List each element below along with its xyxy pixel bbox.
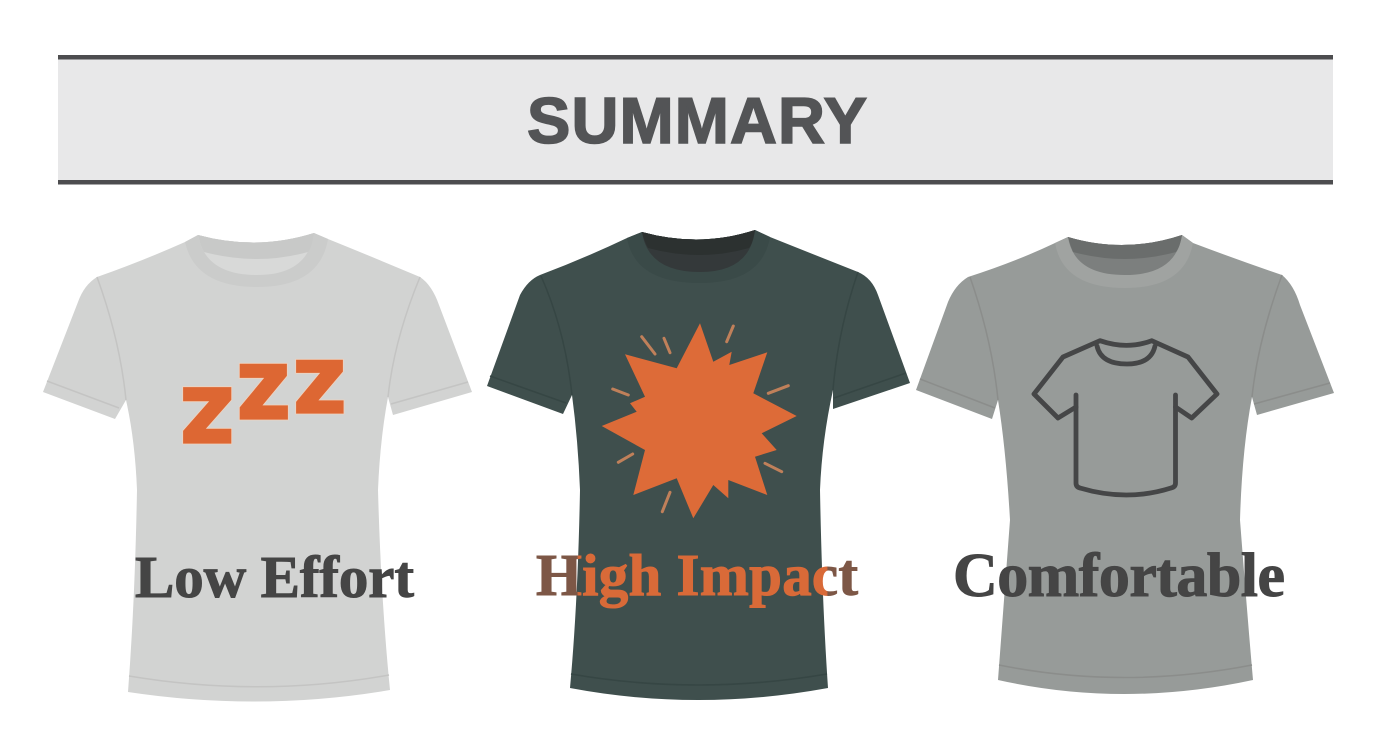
icon: t-shirt outline: [1034, 341, 1217, 495]
label: comfortable: Comfortable: [953, 542, 1285, 610]
burst rays: [613, 326, 788, 512]
t-shirt: mid grey: [916, 235, 1334, 694]
label: low effort: Low Effort: [135, 544, 414, 610]
icon: zzz: [183, 359, 344, 444]
t-shirt: dark green: [487, 230, 910, 700]
icon: burst: [602, 323, 797, 518]
t-shirt: light grey: [43, 233, 472, 702]
panel: comfortable: [916, 235, 1334, 694]
panel: high impact: [487, 230, 910, 700]
header banner: [58, 55, 1333, 184]
panel: low effort: [43, 233, 472, 702]
title: SUMMARY: [527, 84, 867, 157]
label: high impact: High Impact: [536, 542, 858, 608]
